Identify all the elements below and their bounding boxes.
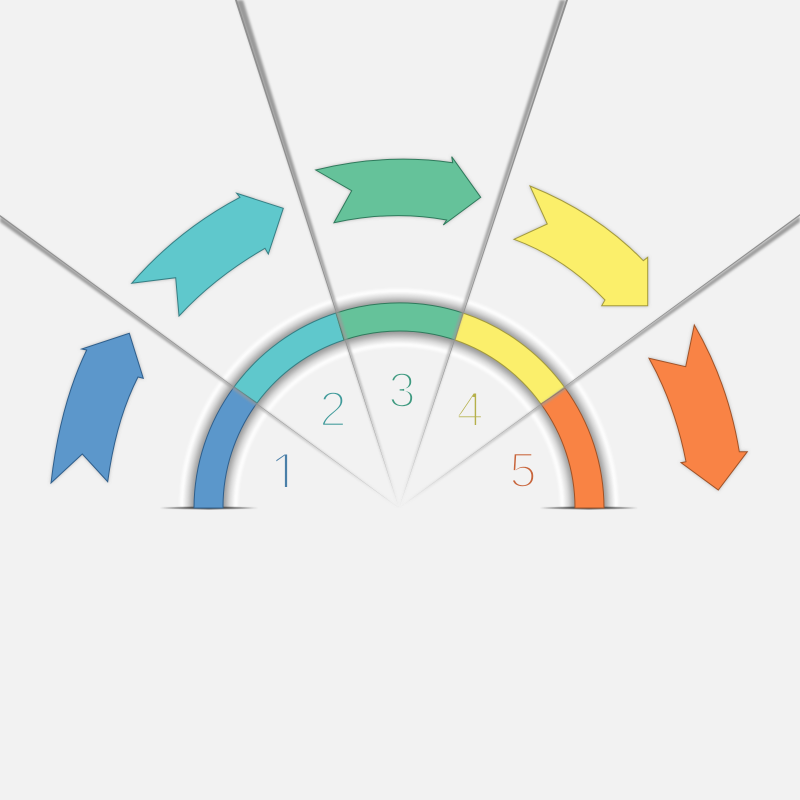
base shadow right	[540, 506, 638, 509]
number 1: 1	[270, 441, 300, 503]
arrow 5: orange	[649, 325, 747, 490]
divider 2	[235, 0, 399, 508]
semicircle ring	[194, 303, 604, 508]
ring halo: embossed shadow and rim	[181, 290, 617, 508]
arrow 2: teal	[132, 193, 283, 316]
number 5: 5	[509, 444, 537, 498]
ring segment 3: green	[336, 303, 463, 340]
arrow 1: blue	[51, 333, 143, 483]
ring segment 2: teal	[234, 313, 344, 403]
divider lines radiating from centre	[0, 0, 800, 508]
ring segment 5: orange	[541, 388, 604, 508]
divider 4	[399, 214, 800, 508]
divider 3	[399, 0, 568, 508]
number 3: 3	[388, 364, 416, 418]
base shadow left	[160, 506, 258, 509]
number 4: 4	[456, 383, 484, 437]
ring segment 4: yellow	[455, 313, 565, 404]
arrow 4: yellow	[514, 186, 648, 306]
number 2: 2	[319, 383, 347, 437]
divider 1	[0, 215, 399, 508]
ring segment 1: blue	[194, 387, 257, 508]
arrow 3: green	[316, 157, 481, 225]
